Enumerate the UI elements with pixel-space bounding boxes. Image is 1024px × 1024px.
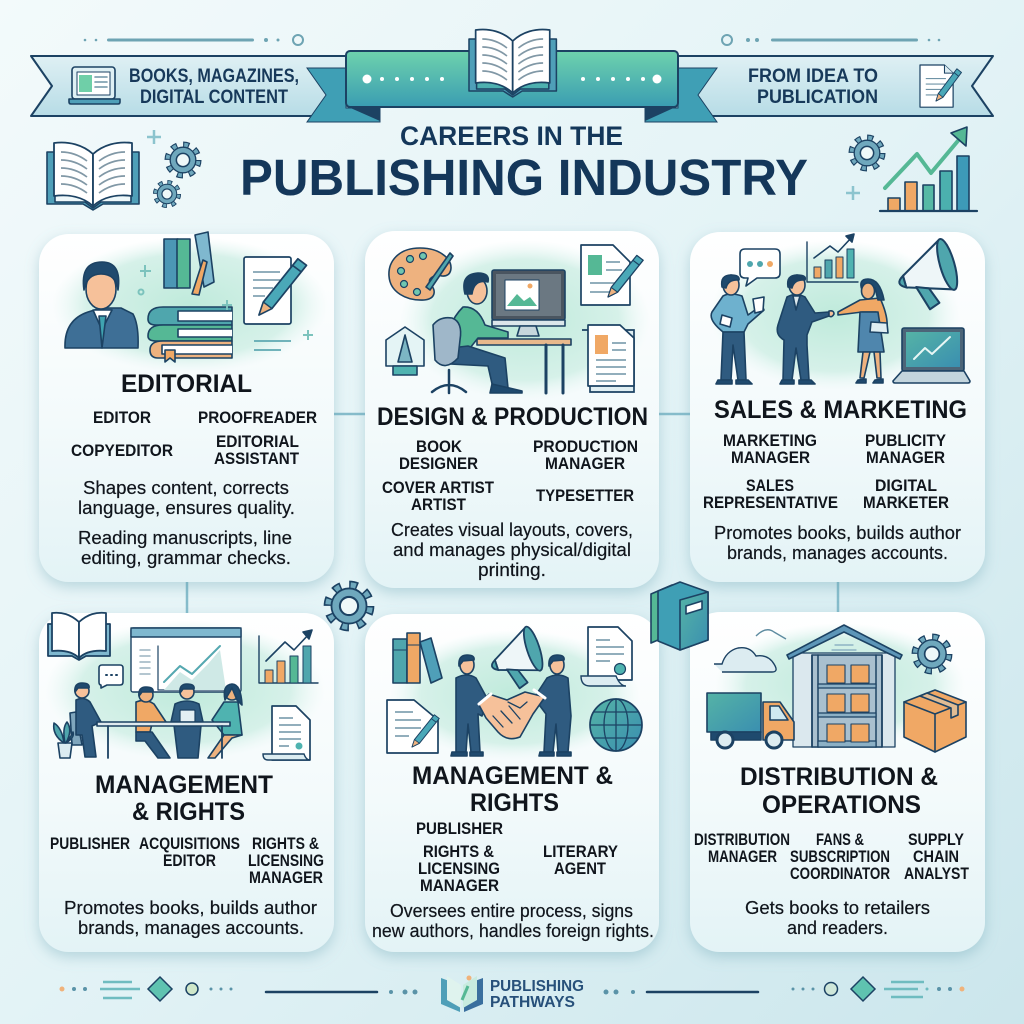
roles: PUBLISHER: [50, 835, 130, 853]
panel: distribution and operations: [690, 612, 985, 952]
roles: EDITORIAL: [216, 433, 299, 451]
roles: MANAGER: [249, 869, 323, 887]
description: language, ensures quality.: [78, 498, 295, 518]
roles: LICENSING: [418, 860, 500, 878]
icon: two business people: [451, 655, 571, 756]
icon: palette: [389, 248, 453, 300]
description: Promotes books, builds author: [64, 898, 317, 918]
ribbon left band: [31, 56, 350, 116]
decorative plus marks: [138, 265, 313, 340]
description: [64, 898, 317, 938]
banner text right: PUBLICATION: [757, 87, 878, 108]
icon: right chart: [259, 630, 318, 683]
roles: PUBLISHER: [416, 820, 503, 838]
icon: laptop: [893, 328, 970, 383]
ribbon right tail: [645, 68, 717, 122]
roles: MARKETING: [723, 432, 817, 450]
heading: [412, 762, 613, 817]
icon: top document and pen: [581, 245, 643, 305]
roles: RIGHTS &: [423, 843, 494, 861]
roles: TYPESETTER: [536, 487, 634, 505]
roles: MANAGER: [731, 449, 810, 467]
top dotted line left: [84, 35, 303, 45]
icon: certificate: [581, 627, 632, 686]
banner text left: BOOKS, MAGAZINES,: [129, 66, 299, 87]
illustration background: [390, 630, 640, 760]
roles: EDITOR: [163, 852, 216, 870]
illustration background: [52, 237, 328, 373]
panel: sales and marketing: [690, 232, 985, 582]
ribbon left tail: [307, 68, 380, 122]
logo wordmark: PATHWAYS: [490, 994, 575, 1011]
roles: MANAGER: [545, 455, 625, 473]
panel: management and rights (left): [39, 613, 334, 952]
roles: SUBSCRIPTION: [790, 848, 890, 866]
icon: man in suit: [777, 275, 834, 384]
roles: RIGHTS &: [252, 835, 319, 853]
top dotted line right: [722, 35, 940, 45]
icon: laptop: [69, 67, 120, 104]
heading: [95, 771, 273, 826]
ribbon folds: [346, 106, 678, 121]
panel: management and rights (centre): [365, 614, 659, 952]
icon: warehouse: [787, 625, 902, 747]
description: [372, 901, 654, 941]
roles: COORDINATOR: [790, 865, 890, 883]
roles: ANALYST: [904, 865, 969, 883]
footer ornament left: [60, 977, 232, 1001]
description: [391, 520, 633, 580]
heading: & RIGHTS: [132, 798, 245, 826]
description: Shapes content, corrects: [83, 478, 289, 498]
icon: speech bubble: [740, 249, 780, 286]
icon: small chart: [807, 234, 858, 282]
icon: document and pen: [244, 257, 307, 324]
connector lines: [187, 414, 838, 613]
heading: MANAGEMENT: [95, 771, 273, 799]
description: and readers.: [787, 918, 888, 938]
icon: open book outline: [48, 613, 110, 660]
icon: centre gear: [328, 585, 370, 627]
icon: document and pen: [920, 65, 962, 107]
icon: clouds: [714, 630, 786, 672]
footer ornament right: [792, 977, 964, 1001]
icon: delivery truck: [707, 693, 794, 748]
description: Creates visual layouts, covers,: [391, 520, 633, 540]
roles: ASSISTANT: [214, 450, 299, 468]
icon: bottom document: [582, 325, 634, 392]
icon: upright books: [164, 232, 214, 295]
heading: DISTRIBUTION &: [740, 763, 938, 791]
roles: AGENT: [554, 860, 606, 878]
roles: COVER ARTIST: [382, 479, 494, 497]
heading: RIGHTS: [470, 789, 559, 817]
icon: signed document: [387, 700, 439, 753]
roles: [71, 409, 317, 468]
icon: presentation screen: [131, 628, 241, 692]
icon: books: [393, 633, 442, 683]
roles: DIGITAL: [875, 477, 937, 495]
roles: EDITOR: [93, 409, 151, 427]
roles: [382, 438, 638, 514]
banner text left: DIGITAL CONTENT: [140, 87, 288, 108]
roles: ARTIST: [411, 496, 466, 514]
description: [78, 478, 295, 568]
roles: [703, 432, 949, 512]
icon: right gear: [846, 138, 882, 200]
icon: growth chart: [880, 127, 977, 211]
roles: LITERARY: [543, 843, 618, 861]
roles: [416, 820, 618, 895]
footer line left: [266, 990, 418, 994]
ribbon right band: [675, 56, 993, 116]
description: Oversees entire process, signs: [390, 901, 633, 921]
illustration background: [710, 240, 960, 390]
logo: publishing pathways: [441, 976, 584, 1012]
icon: left gears: [147, 130, 198, 206]
logo wordmark: [490, 978, 584, 1011]
description: [714, 523, 961, 563]
roles: SALES: [746, 477, 794, 495]
small lines: [254, 341, 291, 350]
heading: [740, 763, 938, 819]
icon: stack of books: [148, 307, 232, 362]
banner text right: [748, 66, 878, 108]
icon: plant: [54, 722, 73, 758]
icon: megaphone: [891, 237, 965, 315]
description: editing, grammar checks.: [81, 548, 291, 568]
roles: REPRESENTATIVE: [703, 494, 838, 512]
roles: PROOFREADER: [198, 409, 317, 427]
heading: EDITORIAL: [121, 370, 252, 398]
description: [745, 898, 930, 938]
icon: handshake: [479, 690, 545, 739]
icon: woman: [838, 279, 888, 383]
roles: ACQUISITIONS: [139, 835, 240, 853]
icon: left open book: [47, 142, 139, 210]
illustration background: [45, 620, 325, 760]
roles: COPYEDITOR: [71, 442, 173, 460]
icon: teal binder book: [651, 582, 708, 650]
icon: contract document: [263, 706, 310, 760]
logo wordmark: PUBLISHING: [490, 978, 584, 995]
footer line right: [604, 990, 758, 994]
illustration background: [715, 623, 965, 747]
title: [240, 121, 808, 206]
description: brands, manages accounts.: [78, 918, 304, 938]
title: CAREERS IN THE: [400, 121, 623, 151]
title: PUBLISHING INDUSTRY: [240, 149, 808, 206]
icon: megaphone: [484, 625, 550, 694]
roles: PRODUCTION: [533, 438, 638, 456]
heading: MANAGEMENT &: [412, 762, 613, 790]
banner text left: [129, 66, 299, 108]
ribbon dots: [362, 74, 662, 84]
heading: OPERATIONS: [762, 791, 921, 819]
icon: speech bubble: [99, 665, 123, 688]
panel: design and production: [365, 231, 659, 588]
description: printing.: [478, 560, 546, 580]
roles: BOOK: [416, 438, 462, 456]
roles: PUBLICITY: [865, 432, 946, 450]
roles: DISTRIBUTION: [694, 831, 790, 849]
icon: meeting table with people: [70, 683, 242, 758]
roles: MANAGER: [420, 877, 499, 895]
roles: CHAIN: [913, 848, 959, 866]
roles: SUPPLY: [908, 831, 964, 849]
roles: MARKETER: [863, 494, 949, 512]
roles: [694, 831, 969, 883]
description: and manages physical/digital: [393, 540, 631, 560]
description: Gets books to retailers: [745, 898, 930, 918]
ribbon centre: [346, 51, 678, 107]
icon: central open book: [469, 29, 556, 97]
roles: MANAGER: [708, 848, 777, 866]
panel: editorial: [39, 232, 334, 582]
description: brands, manages accounts.: [727, 543, 948, 563]
icon: cardboard box: [904, 690, 966, 752]
icon: designer at desk: [432, 270, 571, 393]
description: Reading manuscripts, line: [78, 528, 292, 548]
icon: globe: [590, 699, 642, 751]
roles: LICENSING: [248, 852, 324, 870]
icon: pen nib stand: [386, 327, 424, 375]
icon: editor person: [65, 262, 138, 348]
heading: SALES & MARKETING: [714, 396, 967, 424]
illustration background: [400, 240, 650, 400]
header ribbon banner: [31, 51, 993, 122]
logo mark: [441, 976, 483, 1012]
icon: gear: [915, 637, 949, 671]
roles: DESIGNER: [399, 455, 478, 473]
roles: MANAGER: [866, 449, 945, 467]
icon: person with document: [711, 275, 764, 384]
roles: FANS &: [816, 831, 864, 849]
description: new authors, handles foreign rights.: [372, 921, 654, 941]
description: Promotes books, builds author: [714, 523, 961, 543]
banner text right: FROM IDEA TO: [748, 66, 878, 87]
roles: [50, 835, 324, 887]
heading: DESIGN & PRODUCTION: [377, 403, 648, 431]
